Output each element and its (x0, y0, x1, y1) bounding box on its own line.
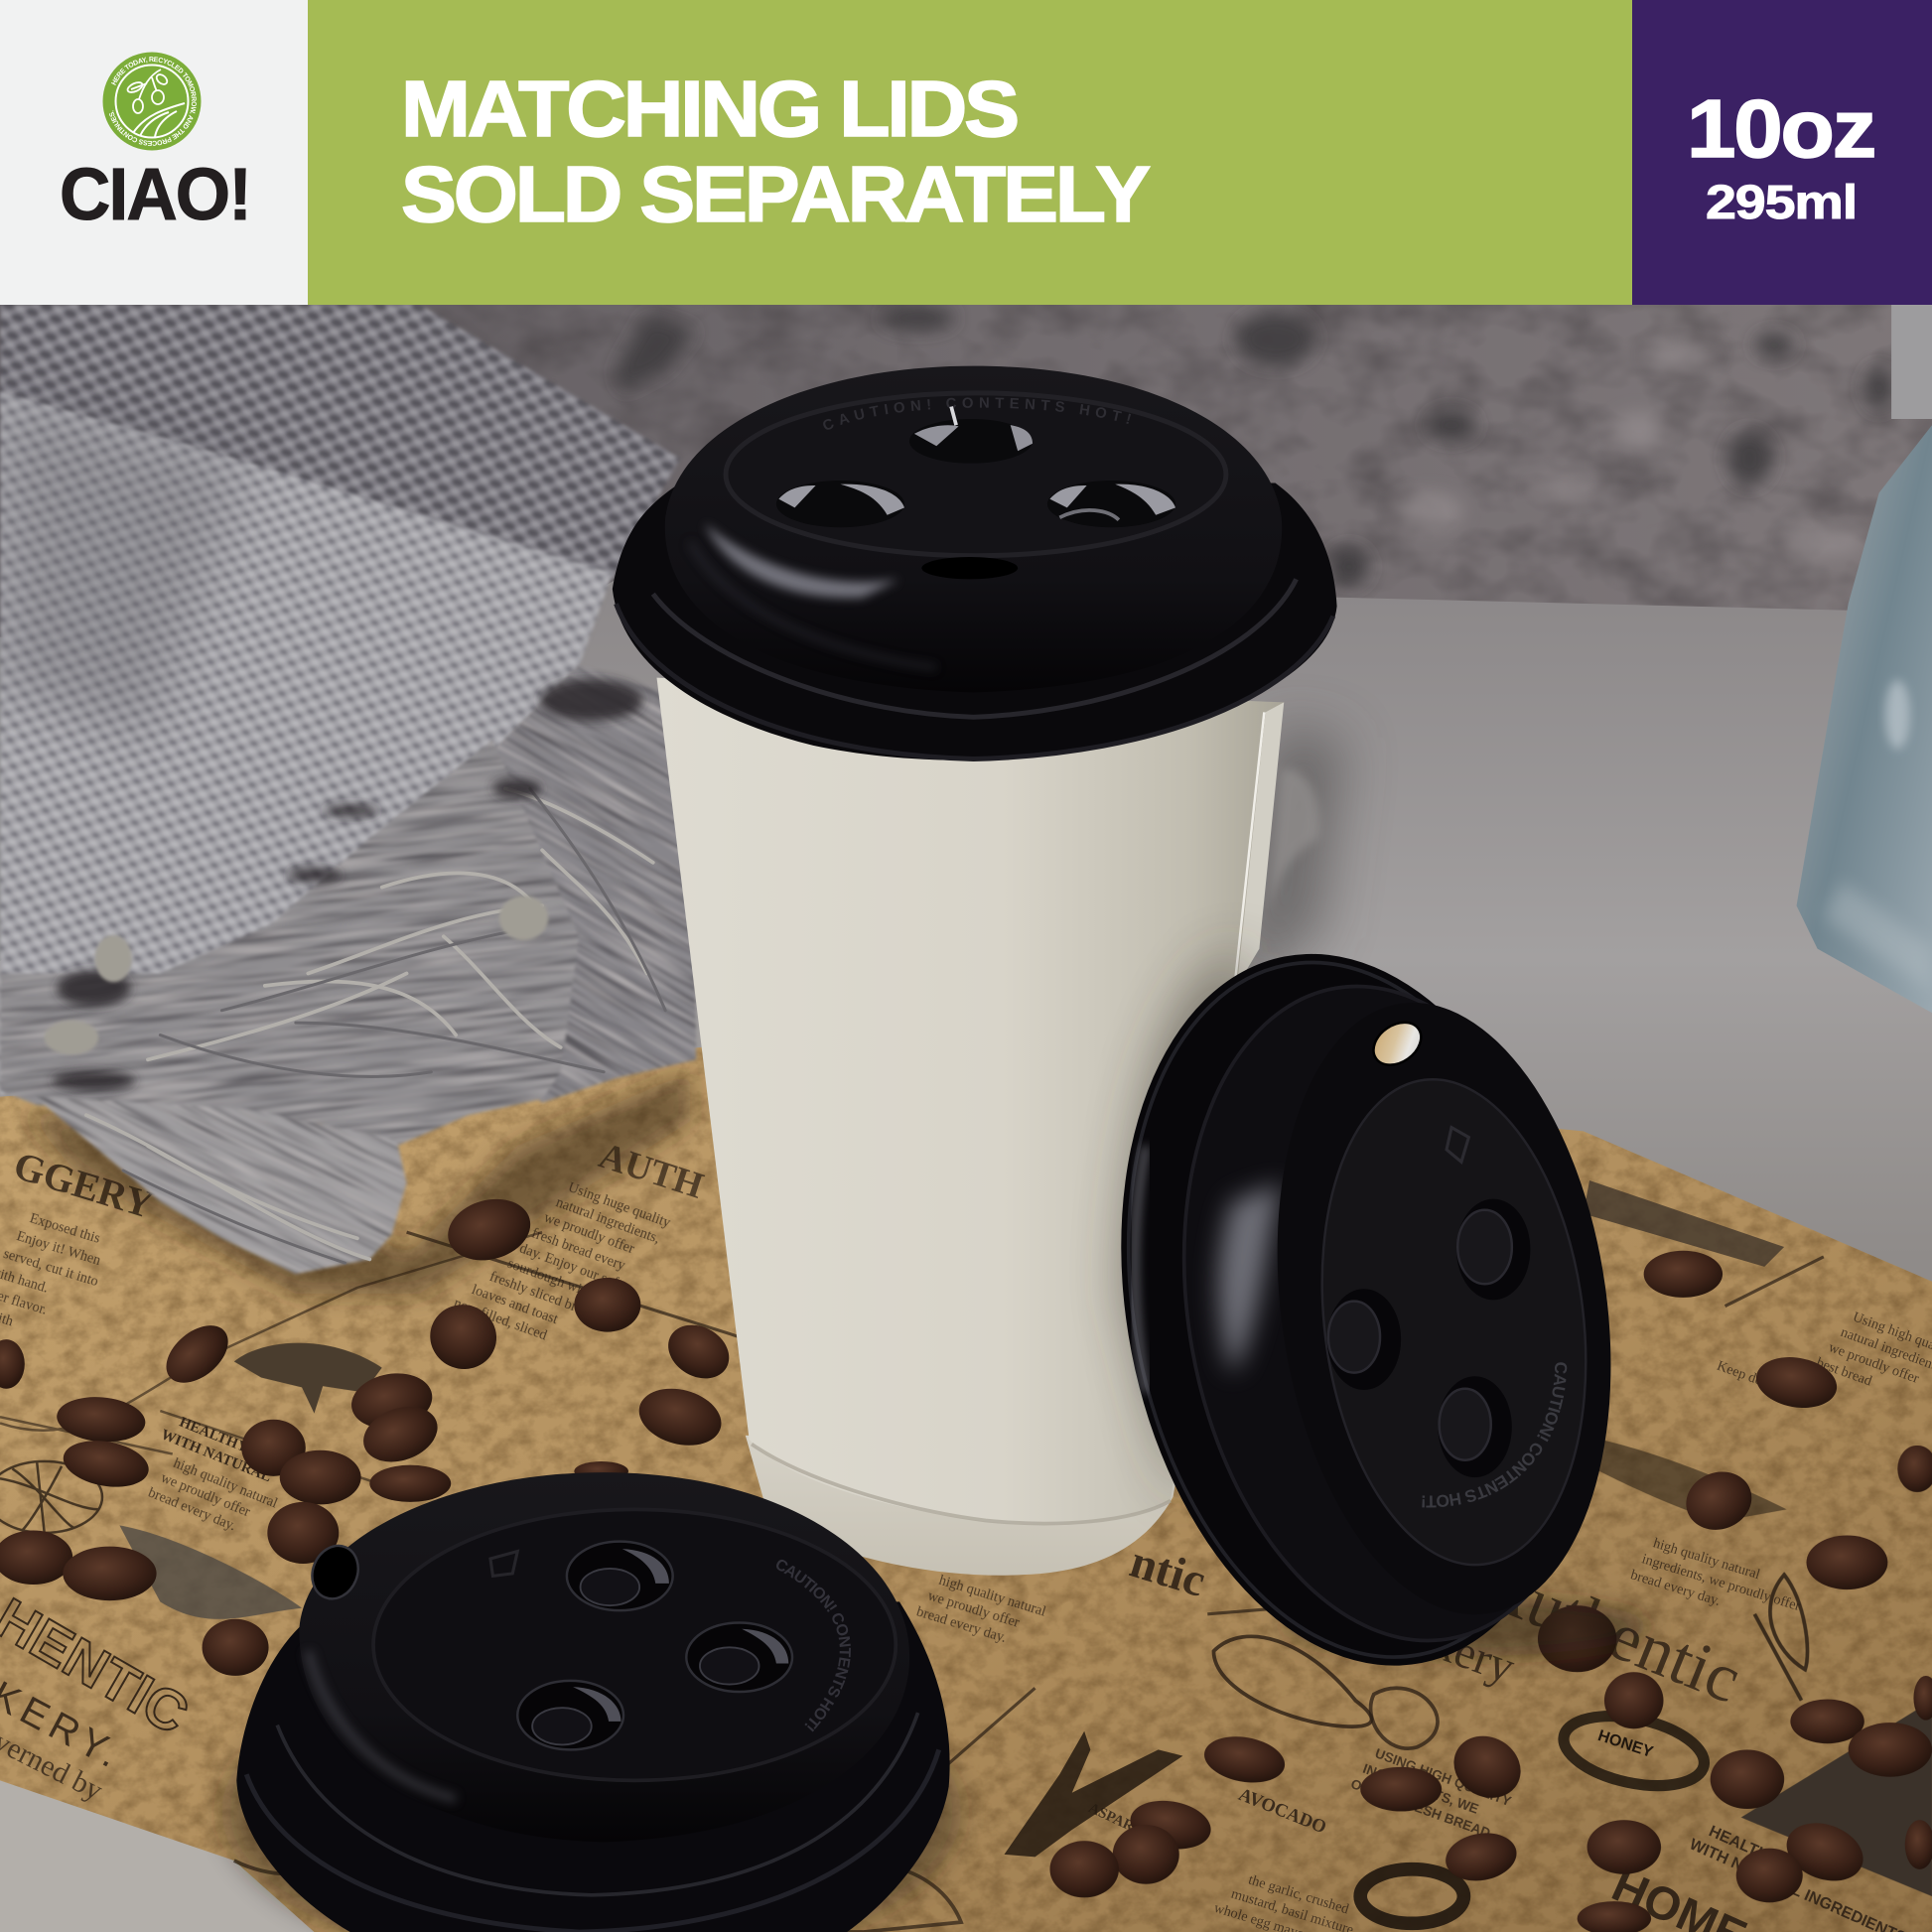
newspaper print: we proudly offer (926, 1588, 1022, 1631)
newspaper print: ntic (1124, 1536, 1211, 1607)
brand name: CIAO! (60, 153, 250, 235)
newspaper print: we proudly offer (1827, 1339, 1921, 1387)
shadow of cup on table (1232, 727, 1343, 986)
bean under lid (574, 1461, 628, 1481)
leaning lid top face (1240, 981, 1648, 1636)
newspaper print: loaves and toast (470, 1282, 560, 1327)
newspaper print: we proudly offer (159, 1470, 252, 1520)
logo badge: HERE TODAY, RECYCLED TOMORROW. AND THE PROCESS CONTINUES. (109, 57, 197, 146)
lying lid vent hole (305, 1539, 366, 1605)
terrazzo wall (0, 305, 1932, 637)
caution text on leaning lid: CAUTION! CONTENTS HOT! (1422, 1362, 1567, 1507)
newspaper print: GGERY (9, 1144, 159, 1227)
black lid lying on paper (208, 1472, 973, 1932)
cup bottom ring (746, 1436, 1182, 1576)
newspaper print: day. Enjoy our soft (517, 1240, 624, 1293)
newspaper print: high quality natural (171, 1455, 280, 1511)
glass bottle (1797, 305, 1932, 1013)
newspaper print: ingredients, we proudly offer (1640, 1551, 1803, 1614)
blanket shadow on paper (25, 1072, 690, 1294)
newspaper print: freshly sliced bread (487, 1269, 597, 1321)
newspaper print: high quality natural (1651, 1535, 1762, 1583)
headline (401, 65, 1151, 238)
lying lid wells (517, 1542, 792, 1749)
size in ounces: 10oz (1687, 82, 1874, 175)
tabletop (0, 580, 1932, 1241)
grey blanket (0, 282, 1174, 1691)
illustrations (234, 1343, 382, 1414)
newspaper print: now filled, sliced (452, 1296, 549, 1343)
lying lid dome (300, 1472, 909, 1842)
blanket lower fold (0, 392, 613, 1097)
headline banner (308, 0, 1632, 305)
lid top recess (726, 393, 1226, 556)
newspaper print: fresh bread every (529, 1225, 628, 1274)
newspaper print: high quality natural (937, 1573, 1047, 1620)
newspaper print: AVOCADO (1236, 1784, 1329, 1838)
newspaper print: Exposed this (28, 1210, 102, 1247)
leaning black lid (1121, 953, 1664, 1745)
newspaper print: Bakery (1377, 1599, 1522, 1694)
logo panel (0, 0, 308, 305)
newspaper print: INGREDIENTS, WE (1361, 1761, 1480, 1817)
newspaper print (0, 1136, 1932, 1932)
lid shadow on cup (1128, 949, 1245, 1503)
newspaper print: Keep depending (1715, 1358, 1807, 1405)
newspaper print: AUTH (594, 1136, 708, 1207)
newspaper print: HONEY (1595, 1726, 1656, 1761)
newspaper print: HEALTHY (177, 1415, 250, 1456)
leaning lid vent hole (1365, 1014, 1429, 1073)
leaning lid body (1135, 953, 1650, 1674)
coffee beans (0, 1190, 1932, 1932)
newspaper print: ASPARAGUS (1086, 1800, 1173, 1853)
sip holes (776, 407, 1175, 527)
newspaper print: best bread (1814, 1355, 1874, 1389)
fringe strands (0, 665, 698, 1275)
sip slit (921, 557, 1018, 579)
dome highlight (705, 523, 899, 598)
newspaper print: we proudly offer (542, 1210, 636, 1257)
blanket gaps (52, 679, 643, 1090)
newspaper print: Enjoy it! When (15, 1228, 102, 1269)
recycling mark on lying lid (490, 1552, 517, 1576)
newspaper print: served, cut it into (1, 1246, 100, 1290)
lid dome (665, 366, 1282, 692)
newspaper print: bread every day. (146, 1485, 238, 1535)
caution text on lying lid: CAUTION! CONTENTS HOT! (776, 1560, 851, 1731)
newspaper print: Using huge quality (566, 1179, 673, 1231)
recycling mark (1447, 1128, 1468, 1162)
blanket knots (45, 896, 548, 1054)
newspaper print: OFFER FRESH BREAD (1349, 1776, 1492, 1841)
newspaper print: WITH NATURAL (159, 1427, 274, 1485)
cup body (657, 678, 1284, 1525)
newspaper print: sourdough with (505, 1256, 594, 1301)
size in millilitres: 295ml (1706, 177, 1857, 229)
headline: MATCHING LIDS (401, 65, 1018, 153)
headline: SOLD SEPARATELY (401, 150, 1151, 238)
newspaper print: bread every day. (914, 1604, 1008, 1646)
far tassel behind cup (1271, 768, 1320, 890)
paper cup (657, 678, 1284, 1576)
size panel (1632, 0, 1932, 305)
newspaper print: natural ingredients, (554, 1194, 662, 1247)
black lid on cup (612, 365, 1337, 761)
lying lid flange (236, 1601, 950, 1932)
lid embossed text: CAUTION! CONTENTS HOT! (823, 397, 1131, 430)
leaning lid flange (1063, 913, 1643, 1706)
newspaper (0, 1047, 1932, 1932)
newspaper print: HEALTHY (1706, 1822, 1781, 1868)
leaning lid buttons (1327, 1199, 1530, 1477)
newspaper print: the garlic, crushed (1246, 1871, 1350, 1917)
lying lid recess (373, 1509, 896, 1780)
newspaper print: Authentic (1470, 1545, 1751, 1718)
newspaper print: USING HIGH QUALITY (1373, 1745, 1513, 1809)
lighter table corner at lower left (0, 1781, 314, 1932)
newspaper print: bread every day. (1628, 1567, 1723, 1609)
blanket upper fold (0, 305, 680, 579)
